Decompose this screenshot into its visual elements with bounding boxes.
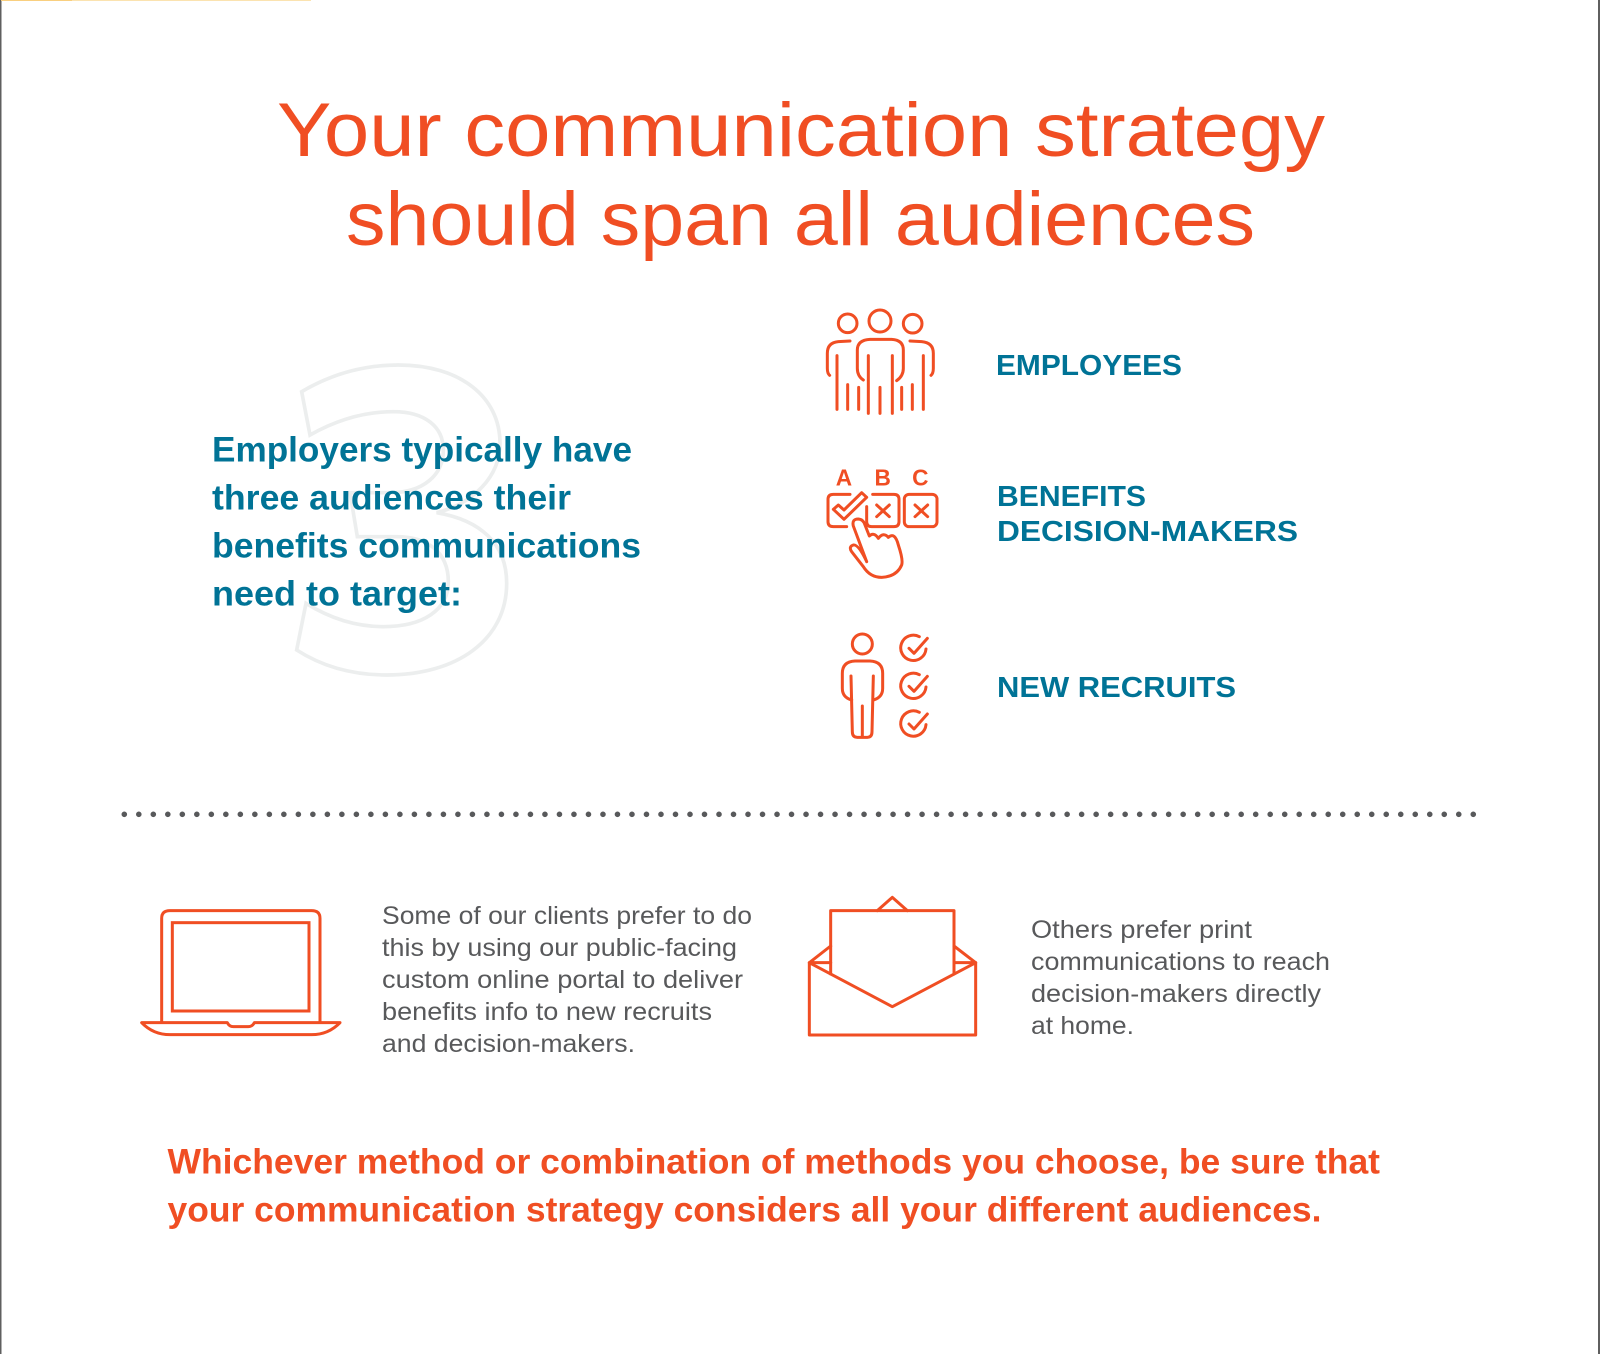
label: new recruits: NEW RECRUITS xyxy=(997,672,1236,704)
closing statement xyxy=(168,1142,1380,1230)
text: print communications xyxy=(1031,916,1330,1040)
text: print communications: at home. xyxy=(1031,1012,1134,1040)
intro text: three audiences their xyxy=(212,478,571,518)
closing statement: your communication strategy considers all your different audiences. xyxy=(168,1190,1322,1230)
title xyxy=(277,88,1325,262)
intro text: need to target: xyxy=(212,574,462,614)
icon: A B C choice with pointing hand: A xyxy=(836,465,852,491)
text: online portal: Some of our clients prefer to do xyxy=(382,902,752,930)
intro text xyxy=(212,430,641,614)
text: online portal: this by using our public-facing xyxy=(382,934,737,962)
icon: A B C choice with pointing hand xyxy=(828,465,937,577)
label: employees: EMPLOYEES xyxy=(996,350,1182,382)
icon: employees group xyxy=(827,310,933,413)
text: online portal: benefits info to new recruits xyxy=(382,998,712,1026)
label: benefits decision-makers xyxy=(997,481,1298,548)
icon: new recruit with checklist xyxy=(842,634,927,737)
text: print communications: Others prefer print xyxy=(1031,916,1252,944)
icon: laptop xyxy=(142,911,340,1035)
large outlined numeral 3 xyxy=(297,365,507,675)
intro text: benefits communications xyxy=(212,526,641,566)
label: benefits decision-makers: BENEFITS xyxy=(997,481,1146,513)
text: print communications: communications to reach xyxy=(1031,948,1330,976)
closing statement: Whichever method or combination of methods you choose, be sure that xyxy=(168,1142,1380,1182)
label: benefits decision-makers: DECISION-MAKERS xyxy=(997,516,1298,548)
icon: open envelope xyxy=(809,897,976,1035)
title: Your communication strategy xyxy=(277,88,1325,173)
title: should span all audiences xyxy=(346,177,1255,262)
intro text: Employers typically have xyxy=(212,430,632,470)
text: online portal: custom online portal to deliver xyxy=(382,966,743,994)
text: online portal: and decision-makers. xyxy=(382,1030,635,1058)
text: online portal xyxy=(382,902,752,1058)
icon: A B C choice with pointing hand: C xyxy=(912,465,929,491)
text: print communications: decision-makers directly xyxy=(1031,980,1322,1008)
icon: A B C choice with pointing hand: B xyxy=(874,465,891,491)
